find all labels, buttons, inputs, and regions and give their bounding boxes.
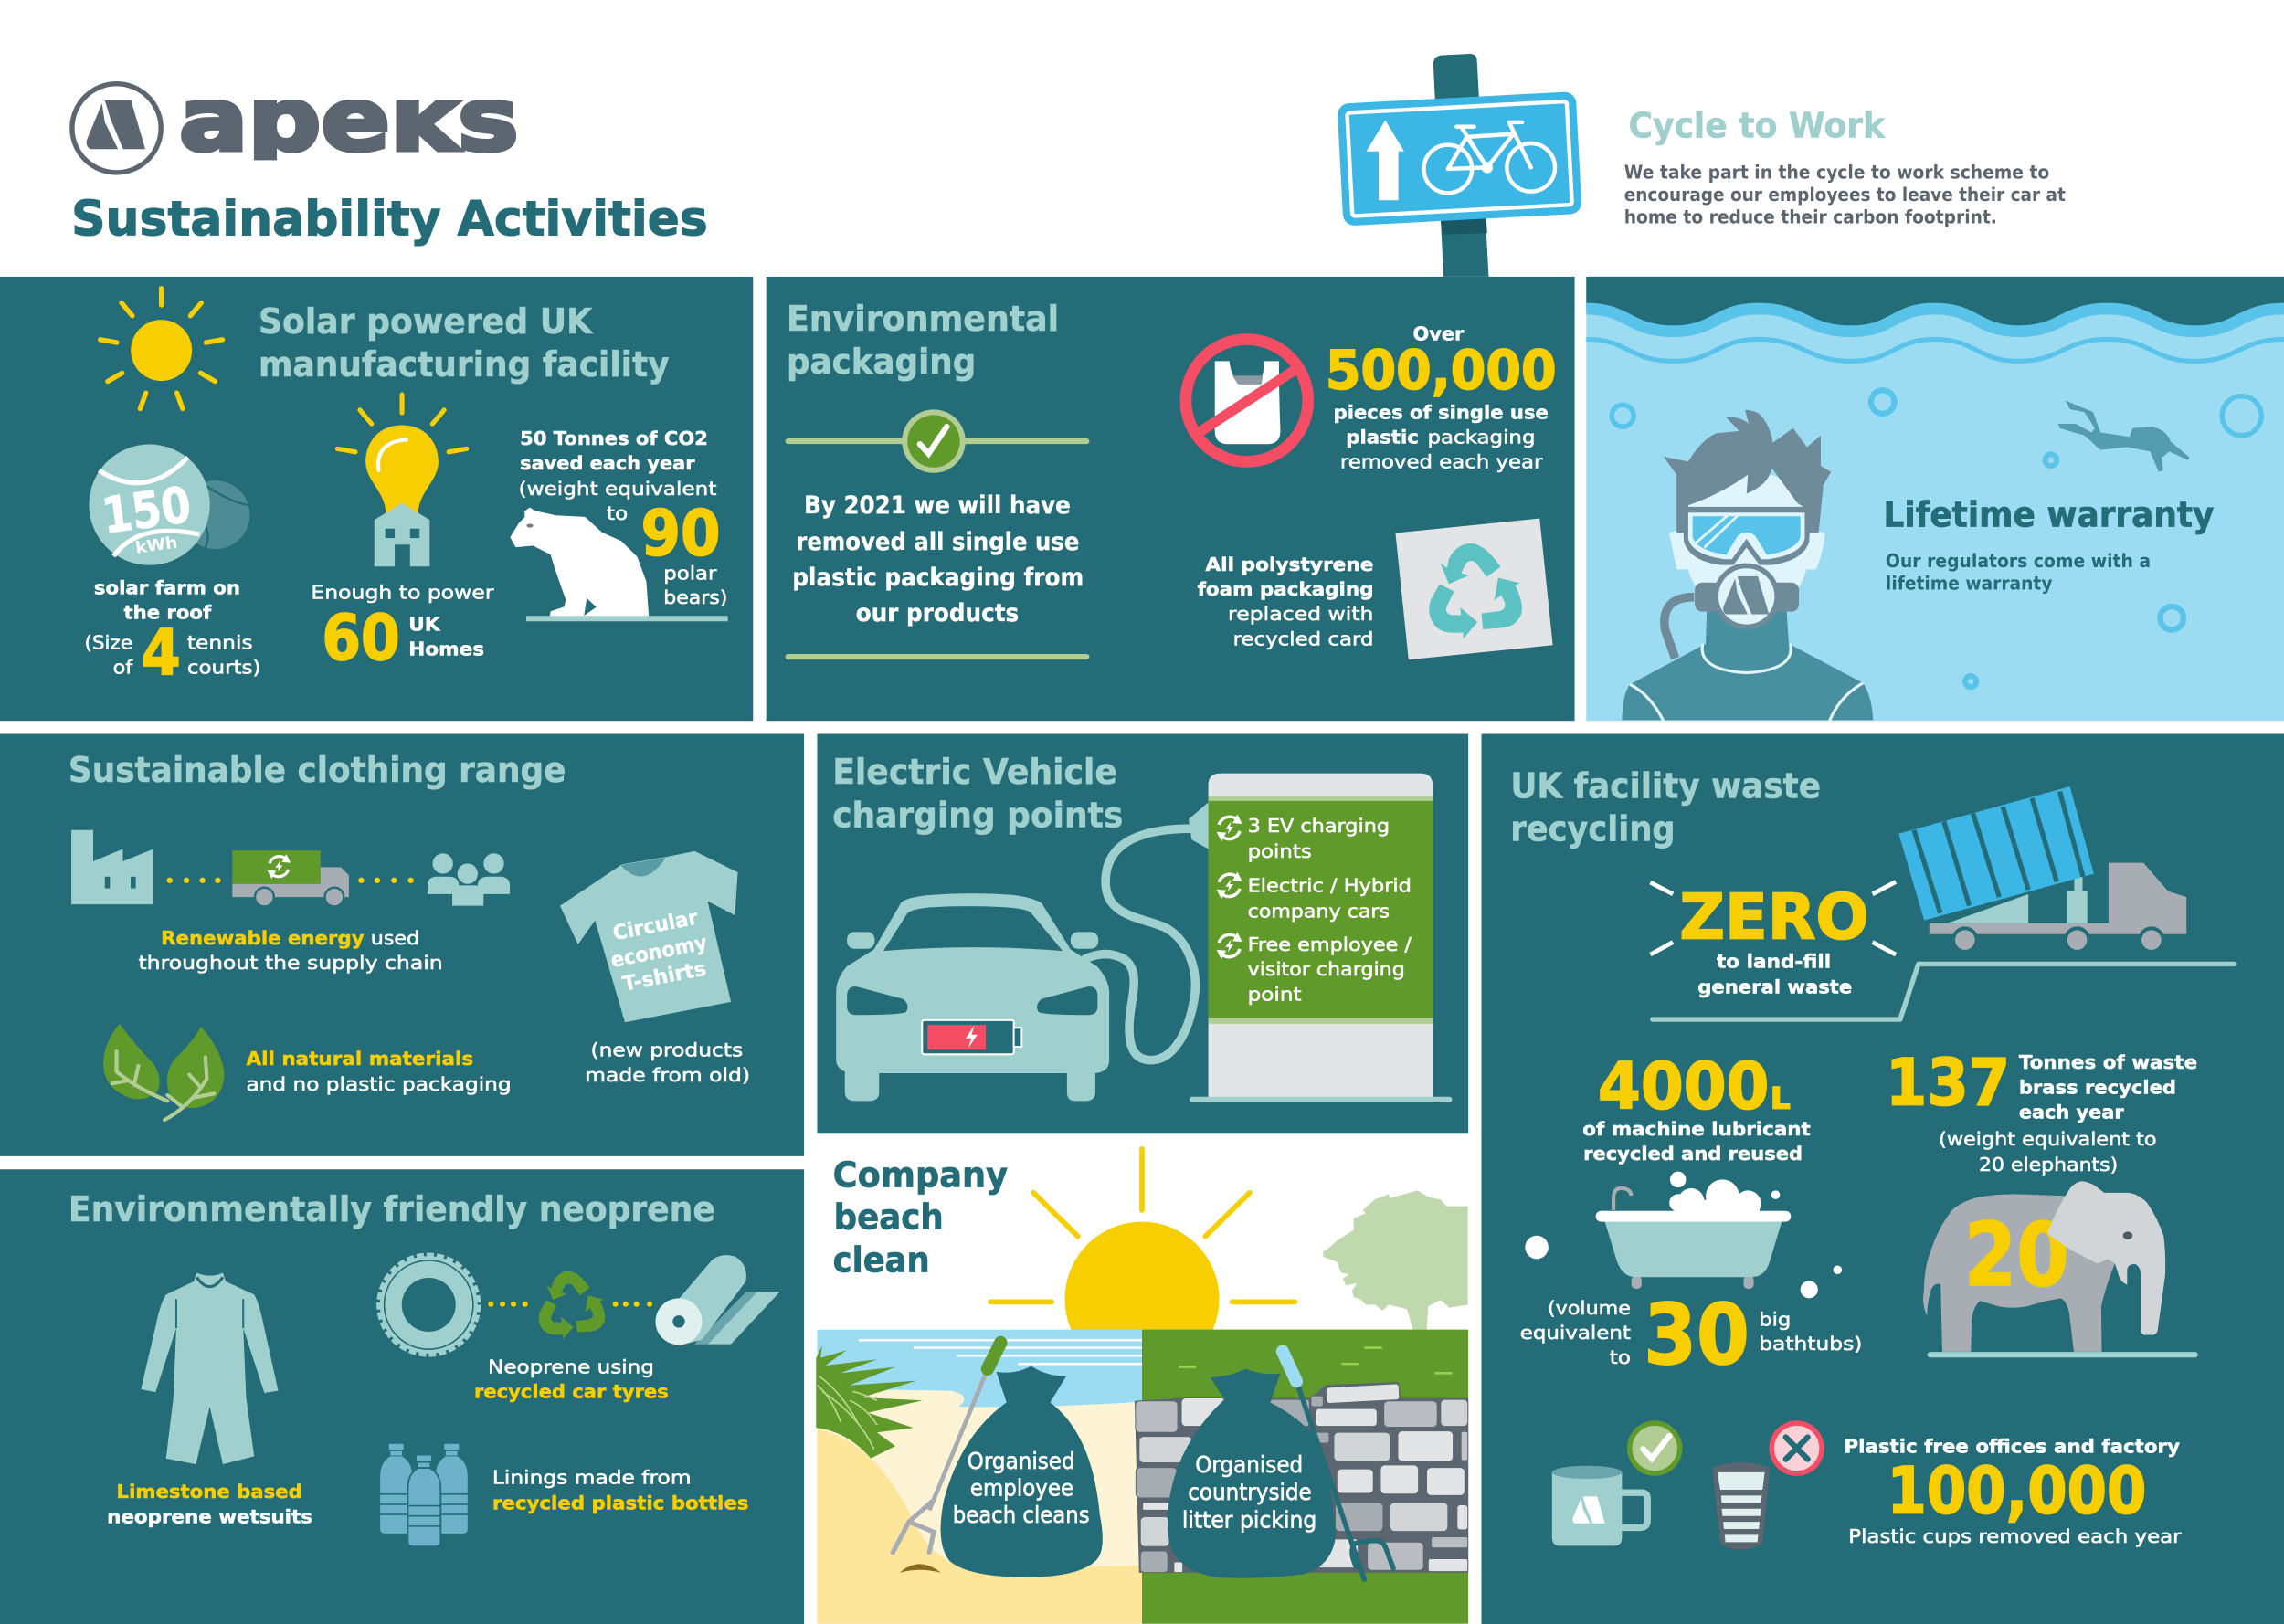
stat: 30 bathtubs <box>1520 1287 1862 1383</box>
cycle to work text <box>1624 106 2066 228</box>
dots: recycle to roll <box>613 1302 652 1307</box>
text: charger list: company cars <box>1248 900 1390 922</box>
text: CO2 saved: to <box>607 502 628 524</box>
icon: circular economy t-shirt: economy <box>608 931 710 973</box>
icon: electric car <box>836 893 1109 1101</box>
heading: lifetime warranty: Lifetime warranty <box>1884 494 2215 535</box>
text: polystyrene <box>1198 554 1374 649</box>
icon: tennis balls with 150 kWh: 150 <box>99 476 195 545</box>
text: 500,000 pieces: plastic <box>1346 426 1419 448</box>
icon: rubbish bag, beach: employee <box>970 1474 1073 1501</box>
heading: solar <box>259 301 670 385</box>
icon: check on line <box>788 409 1086 473</box>
icon: green recycle symbol <box>539 1271 605 1339</box>
icon: rubbish bag, countryside: litter picking <box>1182 1506 1316 1533</box>
text: enough to power <box>311 581 494 675</box>
text: solar farm: solar farm on <box>94 576 240 598</box>
icon: rubbish bag, beach <box>941 1366 1103 1577</box>
dots: factory to truck <box>167 878 221 883</box>
text: new products: made from old) <box>585 1064 750 1086</box>
icon: sun <box>100 289 223 408</box>
heading: neoprene: Environmentally friendly neoprene <box>69 1189 715 1230</box>
heading: waste recycling: UK facility waste <box>1510 766 1821 807</box>
stat: 4000L lubricant <box>1582 1049 1811 1165</box>
text: polystyrene: foam packaging <box>1198 578 1374 600</box>
text: 2021 commitment: removed all single use <box>796 528 1079 556</box>
heading: environmental packaging: packaging <box>787 342 976 383</box>
stat: 100,000 plastic cups <box>1844 1435 2182 1547</box>
icon: tennis balls with 150 kWh <box>89 444 249 565</box>
icon: small swimming diver <box>2058 400 2189 472</box>
text: charger list: 3 EV charging <box>1248 815 1390 837</box>
illustration: diver with mask and regulator <box>1622 410 1873 721</box>
stat: 4000L lubricant: L <box>1771 1081 1791 1115</box>
text: charger list: point <box>1248 983 1302 1005</box>
icon: recycled card <box>1395 519 1553 659</box>
icon: rubbish bag, countryside: Organised <box>1195 1451 1303 1478</box>
heading: beach clean <box>833 1155 1008 1281</box>
panel: lifetime warranty <box>1586 277 2284 721</box>
icon: tyre <box>378 1255 479 1355</box>
stat: 137 tonnes brass <box>1886 1045 2197 1176</box>
text: natural materials: and no plastic packaging <box>246 1073 512 1095</box>
text: charger list: Free employee / <box>1248 933 1412 955</box>
icon: light bulb and house <box>337 395 467 566</box>
text: natural materials <box>246 1048 512 1095</box>
text: enough to power: Homes <box>408 638 484 659</box>
icon: delivery truck <box>232 850 349 906</box>
icon: circular economy t-shirt: Circular <box>611 906 700 945</box>
icon: reusable mug with tick <box>1552 1420 1683 1545</box>
callout: zero to land-fill: ZERO <box>1679 881 1869 954</box>
heading: solar: manufacturing facility <box>259 344 670 385</box>
text: limestone <box>107 1481 312 1528</box>
text: solar farm: 4 <box>142 617 181 690</box>
callout: zero to land-fill: to land-fill <box>1717 950 1831 972</box>
paragraph: cycle scheme: home to reduce their carbon footprint. <box>1624 206 1997 228</box>
icon: setting sun <box>990 1149 1295 1376</box>
icon: circular economy t-shirt <box>560 851 738 1022</box>
text: 2021 commitment <box>792 491 1084 627</box>
icon: leaves <box>103 1024 225 1120</box>
text: solar farm: the roof <box>124 602 212 624</box>
stat: 137 tonnes brass: (weight equivalent to <box>1939 1128 2156 1150</box>
text: renewable energy: used <box>371 927 419 949</box>
stat: 4000L lubricant: 4000 <box>1598 1049 1769 1123</box>
heading: solar: Solar powered UK <box>259 301 593 343</box>
icon: wetsuit <box>141 1272 279 1464</box>
stat: 30 bathtubs: big <box>1759 1309 1791 1331</box>
text: natural materials: All natural materials <box>246 1048 473 1070</box>
text: CO2 saved: 50 Tonnes of CO2 <box>520 427 708 449</box>
text: plastic bottles: Linings made from <box>492 1467 692 1489</box>
icon: plastic cup with cross <box>1712 1420 1824 1549</box>
callout: zero to land-fill: general waste <box>1697 975 1852 997</box>
text: CO2 saved <box>519 427 727 608</box>
stat: 137 tonnes brass: brass recycled <box>2019 1076 2176 1098</box>
paragraph: regulators: lifetime warranty <box>1886 573 2053 595</box>
text: CO2 saved: bears) <box>663 586 727 608</box>
dots: tyre to recycle <box>488 1302 528 1307</box>
stat: 137 tonnes brass: 20 elephants) <box>1979 1154 2118 1176</box>
text: 500,000 pieces <box>1326 322 1557 473</box>
paragraph: regulators: Our regulators come with a <box>1886 550 2151 572</box>
text: 2021 commitment: plastic packaging from <box>792 564 1084 592</box>
heading: beach clean: Company <box>833 1155 1008 1196</box>
text: 500,000 pieces: removed each year <box>1340 451 1543 473</box>
text: charger list <box>1248 815 1412 1005</box>
text: solar farm: of <box>113 656 133 678</box>
text: solar farm: (Size <box>84 631 132 653</box>
text: 2021 commitment: our products <box>856 599 1019 627</box>
heading: electric vehicle <box>832 752 1123 837</box>
icon: no plastic bag <box>1186 339 1308 461</box>
heading: electric vehicle: charging points <box>832 796 1123 837</box>
text: solar farm: courts) <box>187 656 260 678</box>
heading: electric vehicle: Electric Vehicle <box>832 752 1117 793</box>
text: polystyrene: replaced with <box>1228 603 1374 625</box>
paragraph: cycle scheme: encourage our employees to leave their car at <box>1624 184 2066 206</box>
text: car tyres: Neoprene using <box>488 1355 654 1377</box>
text: 500,000 pieces: packaging <box>1427 426 1535 448</box>
text: solar farm <box>84 576 260 690</box>
logo: apeks wordmark: apeks <box>179 69 519 171</box>
text: CO2 saved: polar <box>663 563 717 585</box>
panel: company beach clean <box>816 1133 1468 1624</box>
icon: countryside litter picker <box>1283 1352 1393 1579</box>
icon: elephant with 20 <box>1923 1181 2195 1355</box>
text: limestone: Limestone based <box>117 1481 302 1503</box>
illustration: bubbles <box>1612 390 2261 687</box>
icon: tennis balls with 150 kWh: kWh <box>134 533 179 558</box>
text: renewable energy <box>138 927 443 974</box>
stat: 100,000 plastic cups: Plastic cups removed each year <box>1848 1525 2182 1547</box>
icon: tipper truck <box>1898 786 2186 952</box>
heading: beach clean: clean <box>833 1240 930 1281</box>
panel: sustainable clothing range <box>0 734 804 1156</box>
illustration: stone wall <box>1135 1382 1468 1573</box>
stat: 30 bathtubs: to <box>1610 1346 1631 1368</box>
icon: neoprene roll <box>655 1255 780 1345</box>
text: enough to power: 60 <box>322 602 400 675</box>
stat: 30 bathtubs: 30 <box>1644 1287 1750 1383</box>
heading: environmental packaging: Environmental <box>787 299 1059 340</box>
text: renewable energy: throughout the supply chain <box>138 952 443 974</box>
text: solar farm: tennis <box>187 631 253 653</box>
text: enough to power: Enough to power <box>311 581 494 603</box>
ground line <box>1653 964 2235 1019</box>
icon: beach litter picker <box>893 1343 1000 1573</box>
callout: zero to land-fill <box>1650 881 1896 997</box>
text: car tyres <box>474 1355 669 1403</box>
text: plastic bottles: recycled plastic bottles <box>492 1492 749 1514</box>
heading: beach clean: beach <box>834 1197 944 1239</box>
stat: 30 bathtubs: bathtubs) <box>1759 1333 1862 1355</box>
text: 500,000 pieces: pieces of single use <box>1334 401 1549 423</box>
panel: solar powered facility <box>0 277 753 721</box>
stat: 137 tonnes brass: 137 <box>1886 1045 2010 1120</box>
heading: waste recycling: recycling <box>1510 809 1676 850</box>
stat: 4000L lubricant: recycled and reused <box>1583 1143 1803 1165</box>
text: CO2 saved: 90 <box>641 497 720 570</box>
logo: Apeks roundel <box>72 84 161 173</box>
paragraph: cycle scheme <box>1624 161 2066 228</box>
scene: countryside field <box>1142 1330 1468 1624</box>
title: Sustainability Activities <box>71 191 708 247</box>
stat: 137 tonnes brass: Tonnes of waste <box>2019 1051 2197 1073</box>
text: charger list: visitor charging <box>1248 958 1405 980</box>
icon: bathtub with bubbles <box>1525 1172 1842 1298</box>
icon: factory <box>71 830 153 904</box>
panel: UK facility waste recycling <box>1481 734 2284 1624</box>
text: 500,000 pieces: 500,000 <box>1326 339 1557 402</box>
text: CO2 saved: saved each year <box>520 452 695 474</box>
icon: charging station <box>1084 774 1449 1100</box>
stat: 4000L lubricant: of machine lubricant <box>1582 1118 1811 1140</box>
text: charger list: points <box>1248 840 1312 862</box>
panel: environmental packaging <box>767 277 1575 721</box>
stat: 30 bathtubs: (volume <box>1548 1297 1631 1319</box>
heading: clothing: Sustainable clothing range <box>69 750 566 791</box>
text: enough to power: UK <box>408 613 440 635</box>
stat: 30 bathtubs: equivalent <box>1520 1322 1631 1344</box>
text: polystyrene: recycled card <box>1233 627 1374 649</box>
icon: polar bear <box>511 509 728 618</box>
stat: 137 tonnes brass: each year <box>2019 1101 2124 1123</box>
icon: cycle route sign on post <box>1338 54 1582 277</box>
stat: 100,000 plastic cups: 100,000 <box>1887 1454 2146 1529</box>
icon: rubbish bag, countryside <box>1168 1369 1336 1578</box>
panel: electric vehicle charging <box>817 734 1468 1133</box>
text: 2021 commitment: By 2021 we will have <box>804 491 1071 520</box>
icon: elephant with 20: 20 <box>1964 1204 2069 1306</box>
text: limestone: neoprene wetsuits <box>107 1506 312 1528</box>
icon: rubbish bag, beach: Organised <box>968 1448 1075 1474</box>
text: plastic bottles <box>492 1467 749 1514</box>
illustration: waves <box>1586 277 2284 361</box>
stat: 100,000 plastic cups: Plastic free offices and factory <box>1844 1435 2180 1457</box>
icon: plastic bottles <box>380 1444 468 1546</box>
icon: rubbish bag, beach: beach cleans <box>953 1502 1090 1528</box>
text: new products: (new products <box>591 1039 743 1061</box>
heading: waste recycling <box>1510 766 1821 850</box>
icon: people <box>428 853 510 906</box>
heading: cycle to work: Cycle to Work <box>1629 106 1887 147</box>
paragraph: cycle scheme: We take part in the cycle to work scheme to <box>1624 161 2049 183</box>
heading: environmental packaging <box>787 299 1059 383</box>
text: 500,000 pieces: Over <box>1413 322 1465 344</box>
scene: beach <box>816 1330 1142 1624</box>
text: charger list: Electric / Hybrid <box>1248 875 1412 897</box>
panel: environmentally friendly neoprene <box>0 1169 804 1624</box>
text: CO2 saved: (weight equivalent <box>519 478 716 500</box>
icon: rubbish bag, countryside: countryside <box>1188 1479 1312 1505</box>
header: logo and title <box>71 69 708 247</box>
dots: truck to people <box>358 878 414 883</box>
text: polystyrene: All polystyrene <box>1205 554 1374 575</box>
text: renewable energy: Renewable energy <box>161 927 365 949</box>
text: new products <box>585 1039 750 1086</box>
icon: tree <box>1323 1190 1468 1330</box>
paragraph: regulators <box>1886 550 2151 595</box>
icon: circular economy t-shirt: T-shirts <box>620 957 708 997</box>
text: car tyres: recycled car tyres <box>474 1381 669 1403</box>
